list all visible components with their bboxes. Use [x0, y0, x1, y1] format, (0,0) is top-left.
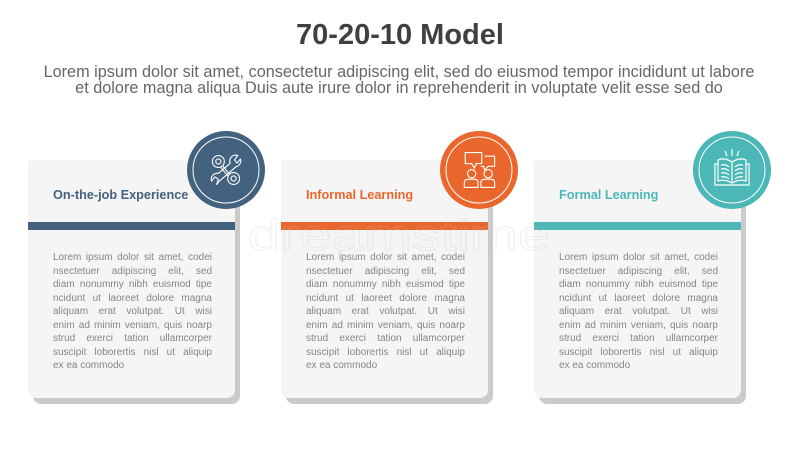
icon: wrench and spanner	[187, 131, 265, 209]
text block: formal: nsectetuer adipiscing elit, sed	[559, 266, 718, 276]
text block: on-the-job	[53, 252, 212, 371]
panel: formal learning	[534, 131, 771, 404]
text block: informal: ncidunt ut laoreet dolore magna	[306, 292, 465, 304]
text block: formal	[559, 252, 718, 371]
text block: on-the-job: aliquam erat volutpat. Ut wisi	[53, 306, 212, 317]
text block: informal: ex ea commodo	[306, 360, 377, 371]
text block: on-the-job: strud exerci tation ullamcorper	[53, 333, 212, 344]
text block: informal: nsectetuer adipiscing elit, sed	[306, 266, 465, 276]
text block: formal: diam nonummy nibh euismod tipe	[559, 279, 718, 290]
subtitle	[44, 63, 754, 97]
colour bar: on-the-job	[28, 222, 235, 230]
text block: on-the-job: ncidunt ut laoreet dolore magna	[53, 292, 212, 304]
title: 70-20-10 Model	[296, 19, 504, 51]
subtitle: et dolore magna aliqua Duis aute irure dolor in reprehenderit in voluptate velit esse sed do	[75, 79, 723, 97]
text block: informal: strud exerci tation ullamcorper	[306, 333, 465, 344]
icon: two people talking	[440, 131, 518, 209]
text block: on-the-job: suscipit loborertis nisl ut aliquip	[53, 346, 212, 358]
heading: formal learning: Formal Learning	[559, 188, 658, 202]
text block: informal	[306, 252, 465, 371]
colour bar: informal	[281, 222, 488, 230]
text block: formal: ex ea commodo	[559, 360, 630, 371]
text block: informal: Lorem ipsum dolor sit amet, codei	[306, 252, 465, 263]
text block: formal: strud exerci tation ullamcorper	[559, 333, 718, 344]
watermark: dreamstime	[248, 211, 550, 260]
text block: informal: aliquam erat volutpat. Ut wisi	[306, 306, 465, 317]
text block: formal: enim ad minim veniam, quis noarp	[559, 320, 718, 330]
text block: on-the-job: nsectetuer adipiscing elit, sed	[53, 266, 212, 276]
icon: open book	[693, 131, 771, 209]
text block: on-the-job: Lorem ipsum dolor sit amet, codei	[53, 252, 212, 263]
text block: on-the-job: diam nonummy nibh euismod tipe	[53, 279, 212, 290]
heading: on-the-job experience: On-the-job Experience	[53, 188, 188, 202]
text block: formal: Lorem ipsum dolor sit amet, codei	[559, 252, 718, 263]
text block: informal: enim ad minim veniam, quis noarp	[306, 320, 465, 330]
subtitle: Lorem ipsum dolor sit amet, consectetur adipiscing elit, sed do eiusmod tempor incididunt ut labore	[44, 63, 754, 81]
text block: on-the-job: ex ea commodo	[53, 360, 124, 371]
heading: informal learning: Informal Learning	[306, 188, 413, 202]
text block: informal: diam nonummy nibh euismod tipe	[306, 279, 465, 290]
text block: formal: suscipit loborertis nisl ut aliquip	[559, 346, 718, 358]
text block: informal: suscipit loborertis nisl ut aliquip	[306, 346, 465, 358]
text block: formal: aliquam erat volutpat. Ut wisi	[559, 306, 718, 317]
panel: informal learning	[281, 131, 518, 404]
text block: formal: ncidunt ut laoreet dolore magna	[559, 292, 718, 304]
panel: on-the-job experience	[28, 131, 265, 404]
colour bar: formal	[534, 222, 741, 230]
text block: on-the-job: enim ad minim veniam, quis noarp	[53, 320, 212, 330]
